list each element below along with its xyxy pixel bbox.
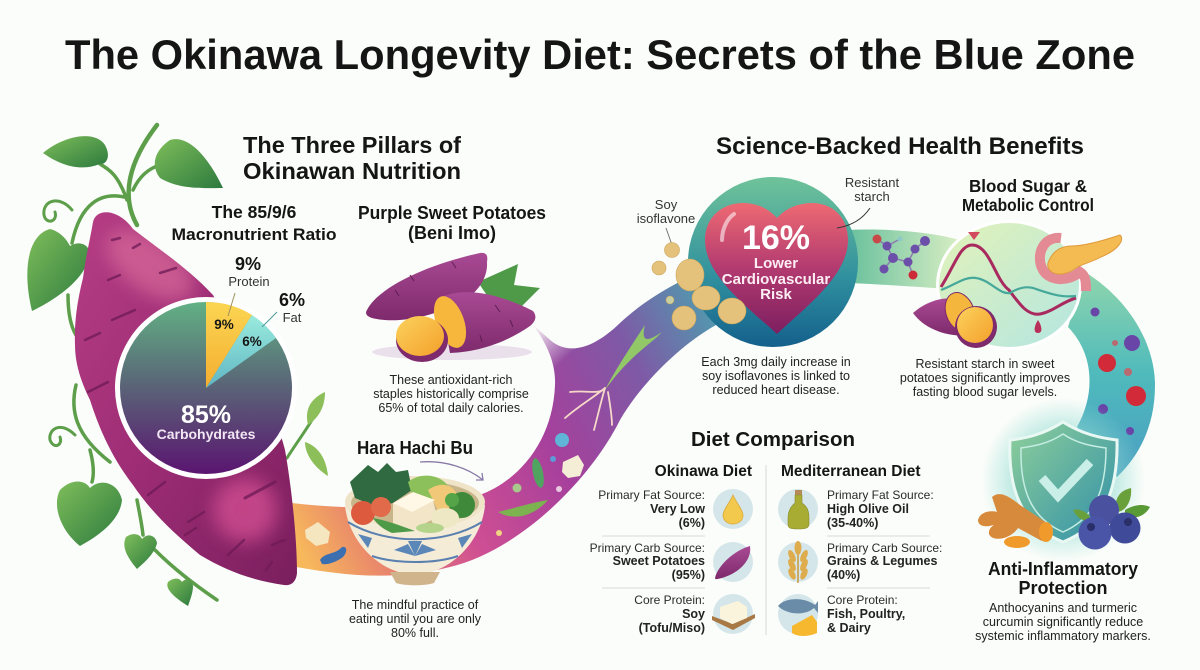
title: The Okinawa Longevity Diet: Secrets of the Blue Zone bbox=[65, 31, 1135, 78]
table: mediterranean diet: High Olive Oil bbox=[827, 502, 909, 516]
leaves bbox=[43, 136, 108, 167]
text: anti-inflammatory description: systemic inflammatory markers. bbox=[975, 629, 1151, 643]
icon: oil drop bbox=[713, 489, 753, 529]
icon: molecule bbox=[872, 234, 930, 280]
macronutrient heading: The 85/9/6 bbox=[212, 202, 297, 222]
flowing ribbon: purple path bbox=[285, 262, 720, 576]
icon: tofu bbox=[712, 594, 755, 634]
icon: wheat bbox=[778, 541, 818, 583]
ribbon decorations: beans, tofu, roots bbox=[305, 325, 662, 564]
table: okinawa diet: Okinawa Diet bbox=[655, 463, 752, 480]
table: okinawa diet: Very Low bbox=[650, 502, 705, 516]
pie chart: macronutrient ratio bbox=[115, 293, 297, 479]
text: sweet potato description: staples historically comprise bbox=[373, 387, 529, 401]
table: mediterranean diet: Fish, Poultry, bbox=[827, 607, 905, 621]
callout: soy isoflavone: isoflavone bbox=[637, 211, 695, 226]
text: soy isoflavones description: reduced heart disease. bbox=[712, 383, 840, 397]
table: mediterranean diet bbox=[781, 463, 942, 635]
column divider bbox=[765, 465, 767, 635]
heading: blood sugar bbox=[962, 176, 1094, 215]
callout: fat: Fat bbox=[283, 310, 302, 325]
text: sweet potato description: 65% of total daily calories. bbox=[378, 401, 524, 415]
table: okinawa diet: Primary Fat Source: bbox=[598, 488, 705, 502]
callout: protein: Protein bbox=[228, 274, 270, 289]
table: mediterranean diet: (35-40%) bbox=[827, 516, 878, 530]
heading: anti-inflammatory bbox=[988, 559, 1138, 598]
heading: diet comparison: Diet Comparison bbox=[691, 428, 855, 451]
macronutrient heading bbox=[172, 202, 336, 244]
table: mediterranean diet: & Dairy bbox=[827, 621, 871, 635]
section heading: three pillars bbox=[243, 132, 461, 184]
pie chart: macronutrient ratio: 85% bbox=[181, 401, 231, 429]
icon: shield with check bbox=[981, 398, 1145, 562]
section heading: three pillars: Okinawan Nutrition bbox=[243, 158, 461, 184]
text: resistant starch description bbox=[900, 357, 1070, 399]
heart circle: cardiovascular risk: Risk bbox=[760, 286, 792, 303]
table: mediterranean diet: Primary Fat Source: bbox=[827, 488, 934, 502]
text: soy isoflavones description: Each 3mg daily increase in bbox=[701, 355, 851, 369]
table: okinawa diet: (Tofu/Miso) bbox=[639, 621, 705, 635]
pie chart: macronutrient ratio: Carbohydrates bbox=[157, 426, 256, 442]
text: hara hachi bu description: 80% full. bbox=[391, 626, 439, 640]
text: soy isoflavones description bbox=[701, 355, 851, 397]
table: okinawa diet: Primary Carb Source: bbox=[590, 541, 705, 555]
text: sweet potato description: These antioxidant-rich bbox=[390, 373, 513, 387]
icon: sweet potatoes with slices bbox=[366, 253, 540, 362]
callout: protein bbox=[228, 254, 270, 289]
heart circle: cardiovascular risk: 16% bbox=[742, 219, 810, 257]
icon: bowl of food bbox=[345, 463, 485, 585]
table: okinawa diet bbox=[590, 463, 752, 635]
callout: protein: 9% bbox=[235, 254, 261, 274]
ribbon: green band bbox=[845, 229, 960, 290]
table: mediterranean diet: Primary Carb Source: bbox=[827, 541, 942, 555]
text: hara hachi bu description bbox=[349, 598, 482, 640]
icon: fish and cheese bbox=[778, 594, 818, 636]
text: resistant starch description: Resistant starch in sweet bbox=[916, 357, 1055, 371]
pie labels: 9% bbox=[214, 317, 234, 332]
text: anti-inflammatory description: curcumin significantly reduce bbox=[983, 615, 1143, 629]
heading: hara hachi bu: Hara Hachi Bu bbox=[357, 438, 473, 458]
table: okinawa diet: (95%) bbox=[672, 568, 705, 582]
heading: blood sugar: Metabolic Control bbox=[962, 195, 1094, 215]
icon: soybeans bbox=[652, 242, 746, 330]
callout: fat bbox=[279, 290, 305, 325]
text: resistant starch description: potatoes significantly improves bbox=[900, 371, 1070, 385]
heading: anti-inflammatory: Protection bbox=[1018, 578, 1108, 598]
table: okinawa diet: Sweet Potatoes bbox=[613, 554, 705, 568]
table: mediterranean diet: Mediterranean Diet bbox=[781, 463, 921, 480]
callout: resistant starch: starch bbox=[854, 189, 890, 204]
callout: resistant starch bbox=[837, 175, 899, 228]
icon: small sweet potato bbox=[713, 542, 753, 582]
vine and leaves bbox=[27, 125, 328, 606]
heart circle: cardiovascular risk bbox=[688, 177, 858, 347]
text: sweet potato description bbox=[373, 373, 529, 415]
icon: pancreas bbox=[1040, 235, 1122, 291]
table: okinawa diet: Soy bbox=[682, 607, 705, 621]
arrow: hara hachi bu bbox=[420, 462, 483, 480]
circle: blood sugar graph bbox=[936, 220, 1082, 350]
icon: turmeric bbox=[978, 494, 1053, 548]
callout: fat: 6% bbox=[279, 290, 305, 310]
table: mediterranean diet: Grains & Legumes bbox=[827, 554, 937, 568]
text: hara hachi bu description: eating until you are only bbox=[349, 612, 482, 626]
pie chart: macronutrient ratio: 6% bbox=[242, 334, 262, 349]
text: soy isoflavones description: soy isoflavones is linked to bbox=[702, 369, 850, 383]
table: okinawa diet: Core Protein: bbox=[634, 593, 705, 607]
text: resistant starch description: fasting blood sugar levels. bbox=[913, 385, 1057, 399]
text: hara hachi bu description: The mindful practice of bbox=[352, 598, 479, 612]
table: okinawa diet: (6%) bbox=[679, 516, 705, 530]
table: mediterranean diet: (40%) bbox=[827, 568, 860, 582]
text: anti-inflammatory description bbox=[975, 601, 1151, 643]
table: mediterranean diet: Core Protein: bbox=[827, 593, 898, 607]
large sweet potato bbox=[75, 212, 297, 585]
section heading: three pillars: The Three Pillars of bbox=[243, 132, 461, 158]
heading: purple sweet potatoes: Purple Sweet Potatoes bbox=[358, 203, 546, 223]
heading: purple sweet potatoes bbox=[358, 203, 546, 243]
icon: blueberries bbox=[1073, 488, 1150, 550]
ribbon: teal right band bbox=[1068, 272, 1155, 477]
heading: anti-inflammatory: Anti-Inflammatory bbox=[988, 559, 1138, 579]
callout: soy isoflavone bbox=[637, 197, 695, 245]
macronutrient heading: Macronutrient Ratio bbox=[172, 225, 336, 244]
heading: blood sugar: Blood Sugar & bbox=[969, 176, 1087, 196]
callout: resistant starch: Resistant bbox=[845, 175, 899, 190]
section heading: health benefits: Science-Backed Health Benefits bbox=[716, 133, 1084, 160]
callout: soy isoflavone: Soy bbox=[655, 197, 678, 212]
icon: sweet potato bbox=[913, 288, 997, 348]
heart circle: cardiovascular risk: Lower bbox=[754, 255, 798, 272]
icon: olive oil bottle bbox=[778, 489, 818, 529]
ribbon dots: antioxidants bbox=[1090, 308, 1146, 435]
heart circle: cardiovascular risk: Cardiovascular bbox=[722, 271, 830, 288]
text: anti-inflammatory description: Anthocyanins and turmeric bbox=[989, 601, 1137, 615]
heading: purple sweet potatoes: (Beni Imo) bbox=[408, 223, 496, 243]
